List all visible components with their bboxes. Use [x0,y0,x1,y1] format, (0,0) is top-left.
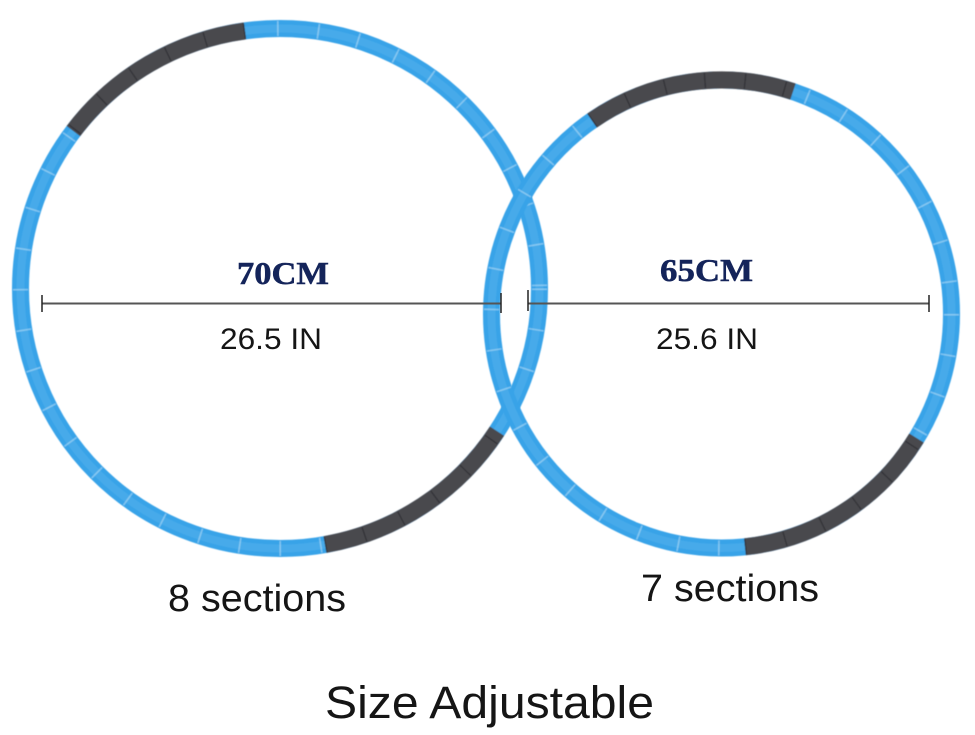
dimension line: 65 cm [528,290,929,312]
caption: 8 sections: 8 sections [168,578,346,620]
label: 70CM: 70CM [237,255,329,291]
title: Size Adjustable: Size Adjustable [325,677,654,728]
dimension line: 70 cm [42,293,501,313]
label: 25.6 IN: 25.6 IN [656,323,758,356]
right hoop: 7 sections, 65 cm [492,80,952,548]
label: 26.5 IN: 26.5 IN [220,323,322,356]
label: 65CM: 65CM [660,252,753,288]
caption: 7 sections: 7 sections [641,568,819,610]
left hoop: 8 sections, 70 cm [20,28,540,548]
